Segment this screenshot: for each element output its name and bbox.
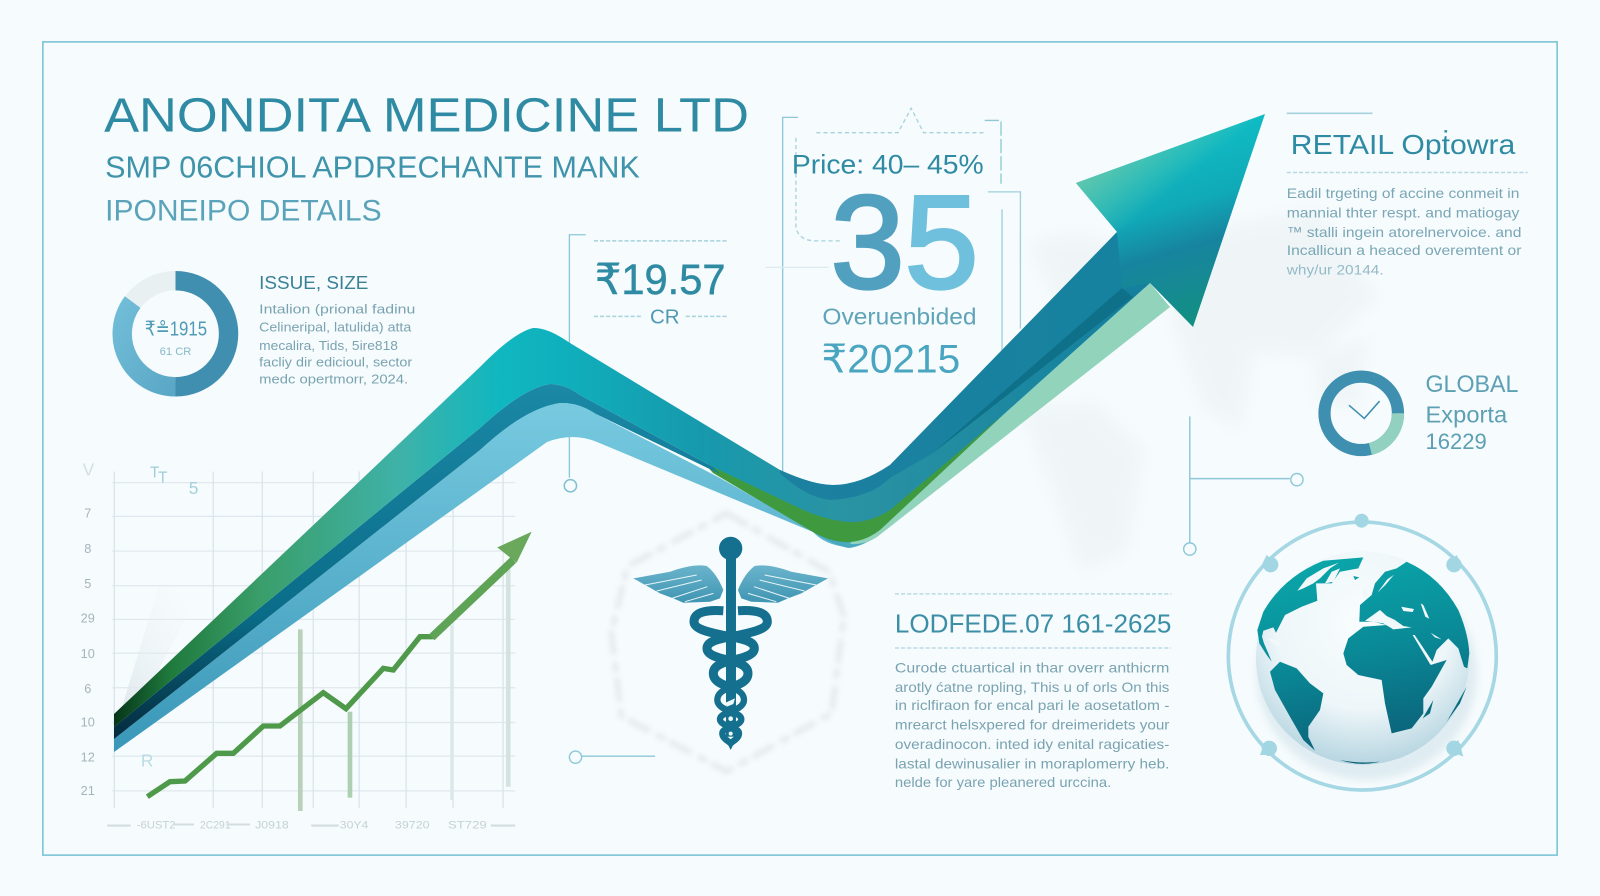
issue size text: medc opertmorr, 2024. [259,372,408,387]
bottom-left line chart: T [158,470,168,487]
retail panel: Incallicun a heaced overemtent or [1287,243,1522,259]
emblem connector [569,751,655,763]
bottom-left line chart [81,460,532,832]
issue size text: ISSUE, SIZE [259,272,368,293]
bottom-left line chart: 21 [81,783,95,798]
light green band [850,283,1170,544]
globe [1256,551,1469,765]
sphere [1256,551,1469,765]
price box: Price: 40– 45% [792,150,984,180]
lodfede text panel: mrearct helsxpered for dreimeridets your [895,718,1170,734]
bottom-left line chart: 5 [189,478,198,498]
bottom-left line chart: 29 [81,610,95,625]
main growth arrow [114,114,1265,752]
bottom-left line chart: 7 [84,505,91,520]
lodfede text panel: in riclfiraon for encal pari le aosetatlom - [895,698,1170,714]
lodfede text panel: nelde for yare pleanered urccina. [895,775,1111,791]
subtitle [105,151,640,227]
wings [633,565,828,603]
clock donut [1324,377,1398,450]
bottom-left line chart: 5 [84,576,91,591]
issue size donut: 61 CR [160,346,191,358]
issue amount callout: CR [650,307,680,329]
bottom-left line chart: 30Y4 [340,820,368,832]
caduceus emblem [611,513,844,771]
light blue band [114,403,847,752]
lodfede text panel [895,594,1171,791]
bottom-left line chart: 6 [84,681,91,696]
price box: ₹20215 [821,337,960,381]
global exports text: GLOBAL [1426,371,1518,398]
price box: Overuenbided [822,304,977,330]
snakes [694,610,767,743]
bottom-left line chart: 10 [81,646,95,661]
price box: 35 [831,169,979,317]
lodfede text panel: arotly ćatne ropling, This u of orls On this [895,680,1169,696]
retail panel: Eadil trgeting of accine conmeit in [1287,186,1519,202]
retail panel [1286,113,1528,279]
lodfede text panel: LODFEDE.07 161-2625 [895,611,1171,639]
global exports text: 16229 [1426,429,1487,454]
bottom-left line chart: T [150,465,159,482]
retail panel: RETAIL Opṫowra [1291,129,1516,160]
arrow head [1076,114,1265,327]
orbit ring [1228,514,1496,790]
bottom-left line chart: 10 [81,715,95,730]
dark teal middle band [114,384,720,739]
issue size donut: ₹≗1915 [145,319,207,341]
connector lines [1184,416,1303,555]
continents [1257,557,1469,764]
issue size text: mecalira, Tids, 5ire818 [259,338,398,353]
issue size donut [122,281,229,387]
issue size text [259,272,415,387]
teal upper band and arrow shaft [114,232,1150,727]
bottom-left line chart: -6UST2 [137,820,176,832]
retail panel: ™ stalli ingein atorelnervoice. and [1287,225,1521,241]
bottom-left line chart: J0918 [255,820,289,832]
bottom-left line chart: R [141,750,153,770]
issue size text: facliy dir edicioul, sector [259,354,413,369]
hexagon outline [611,513,844,771]
retail panel: why/ur 20144. [1286,263,1384,279]
bottom-left line chart: 39720 [395,820,430,832]
lodfede text panel: Curode ctuartical in thar overr anthicrm [895,660,1169,676]
bottom-left line chart: 8 [84,541,91,556]
retail panel: mannial thter respt. and matiogay [1287,205,1520,221]
price box [765,108,1020,480]
bottom-left line chart: ST729 [448,820,487,832]
seas and bays [1267,563,1442,664]
issue size text: Celineripal, latulida) atta [259,320,412,335]
upper shaft shade [780,232,1125,500]
subtitle: IPONEIPO DETAILS [105,194,382,227]
subtitle: SMP 06CHIOL APDRECHANTE MANK [105,151,640,185]
green band [705,415,1003,542]
issue amount callout: ₹19.57 [595,256,726,304]
lodfede text panel: lastal dewinusalier in moraplomerry heb. [895,756,1169,772]
dark stripe [933,288,1133,453]
global exports text: Exporta [1426,401,1508,427]
staff [726,547,736,737]
issue size text: Intalion (prional fadinu [259,301,415,316]
bottom-left line chart: V [83,460,95,480]
lodfede text panel: overadinocon. inted idy enital ragicaties- [895,737,1170,753]
global exports text [1426,371,1518,454]
issue amount callout [564,235,729,492]
valley teal sliver [813,528,880,548]
bottom-left line chart: 2C291 [200,820,231,832]
bottom-left line chart: 12 [81,749,95,764]
faint world map background [1020,209,1378,571]
title: ANONDITA MEDICINE LTD [104,90,749,143]
